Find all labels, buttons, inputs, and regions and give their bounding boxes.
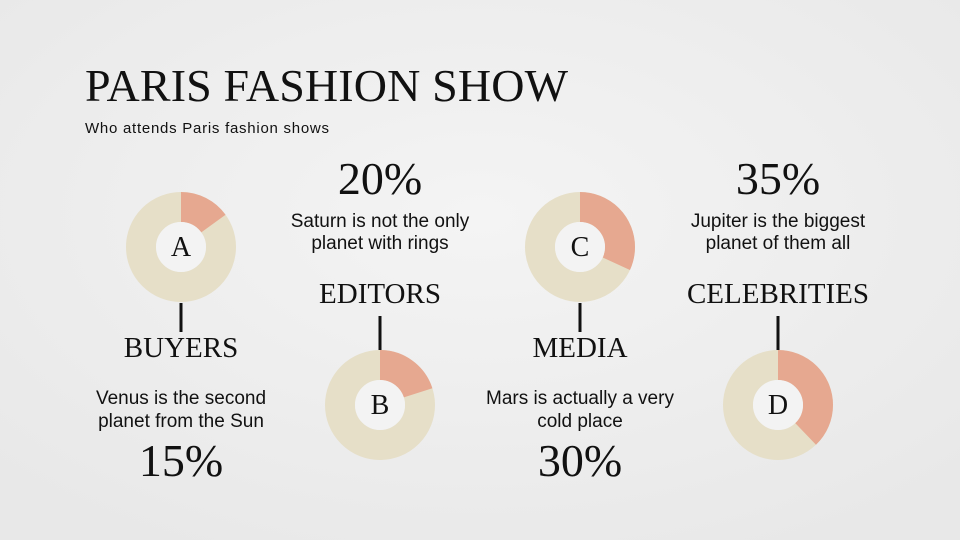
block: buyers: Venus is the second bbox=[96, 388, 266, 409]
donut B bbox=[340, 365, 420, 445]
donut C bbox=[540, 207, 620, 287]
donut D: D bbox=[768, 390, 788, 421]
block: buyers: planet from the Sun bbox=[98, 411, 264, 432]
block: editors: planet with rings bbox=[311, 233, 449, 254]
donut C: C bbox=[571, 232, 589, 263]
subtitle: Who attends Paris fashion shows bbox=[85, 120, 329, 137]
block: media bbox=[486, 332, 674, 486]
block: celebrities: Jupiter is the biggest bbox=[691, 211, 866, 232]
connector A bbox=[180, 303, 182, 332]
connector C bbox=[578, 303, 582, 332]
connector B bbox=[378, 316, 382, 350]
donut B: B bbox=[371, 390, 389, 421]
block: editors: 20% bbox=[338, 153, 422, 204]
block: editors bbox=[291, 153, 470, 310]
block: media: cold place bbox=[537, 411, 623, 432]
block: media: 30% bbox=[538, 435, 622, 486]
block: buyers: 15% bbox=[139, 435, 223, 486]
block: media: Mars is actually a very bbox=[486, 388, 674, 409]
block: buyers: BUYERS bbox=[124, 332, 238, 364]
title: PARIS FASHION SHOW bbox=[85, 60, 569, 111]
block: celebrities: CELEBRITIES bbox=[687, 278, 869, 310]
donut A: A bbox=[171, 232, 192, 263]
block: editors: EDITORS bbox=[319, 278, 441, 310]
block: celebrities bbox=[687, 153, 869, 310]
donut D bbox=[738, 365, 818, 445]
block: media: MEDIA bbox=[532, 332, 628, 364]
connector D bbox=[776, 316, 780, 350]
block: celebrities: 35% bbox=[736, 153, 820, 204]
donut A bbox=[141, 207, 221, 287]
block: editors: Saturn is not the only bbox=[291, 211, 470, 232]
block: buyers bbox=[96, 332, 266, 486]
block: celebrities: planet of them all bbox=[706, 233, 850, 254]
